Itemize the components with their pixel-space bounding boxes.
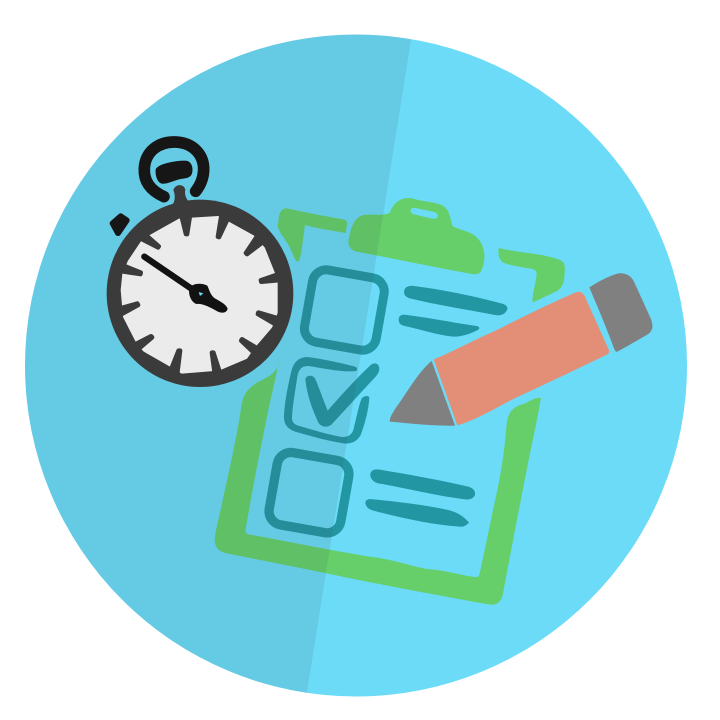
pencil body [434, 292, 609, 425]
clipboard lower frame [215, 361, 541, 605]
stopwatch [107, 142, 293, 387]
clipboard top-left corner [278, 208, 347, 262]
dial face [122, 218, 276, 372]
pencil [390, 273, 652, 426]
checkbox 1 [302, 268, 386, 352]
ring clasp [157, 162, 191, 183]
pencil eraser [589, 273, 652, 352]
hand pivot [199, 292, 203, 296]
clipboard top-right corner [499, 248, 565, 302]
checkbox 3 [267, 450, 351, 535]
checkbox 2 with tick [284, 357, 379, 443]
clip hole [411, 208, 438, 219]
stem [170, 185, 192, 207]
text lines 3 [365, 469, 475, 527]
case [107, 200, 293, 387]
pencil tip [390, 361, 455, 426]
clipboard with checklist and pencil [215, 198, 652, 605]
stopwatch hands [144, 257, 228, 313]
text lines 1 [399, 286, 507, 337]
pale glass shading on left half [25, 34, 411, 693]
stopwatch ring [144, 142, 204, 197]
side button [113, 216, 127, 233]
dial tick marks [119, 215, 279, 375]
clipboard clip [348, 198, 484, 274]
